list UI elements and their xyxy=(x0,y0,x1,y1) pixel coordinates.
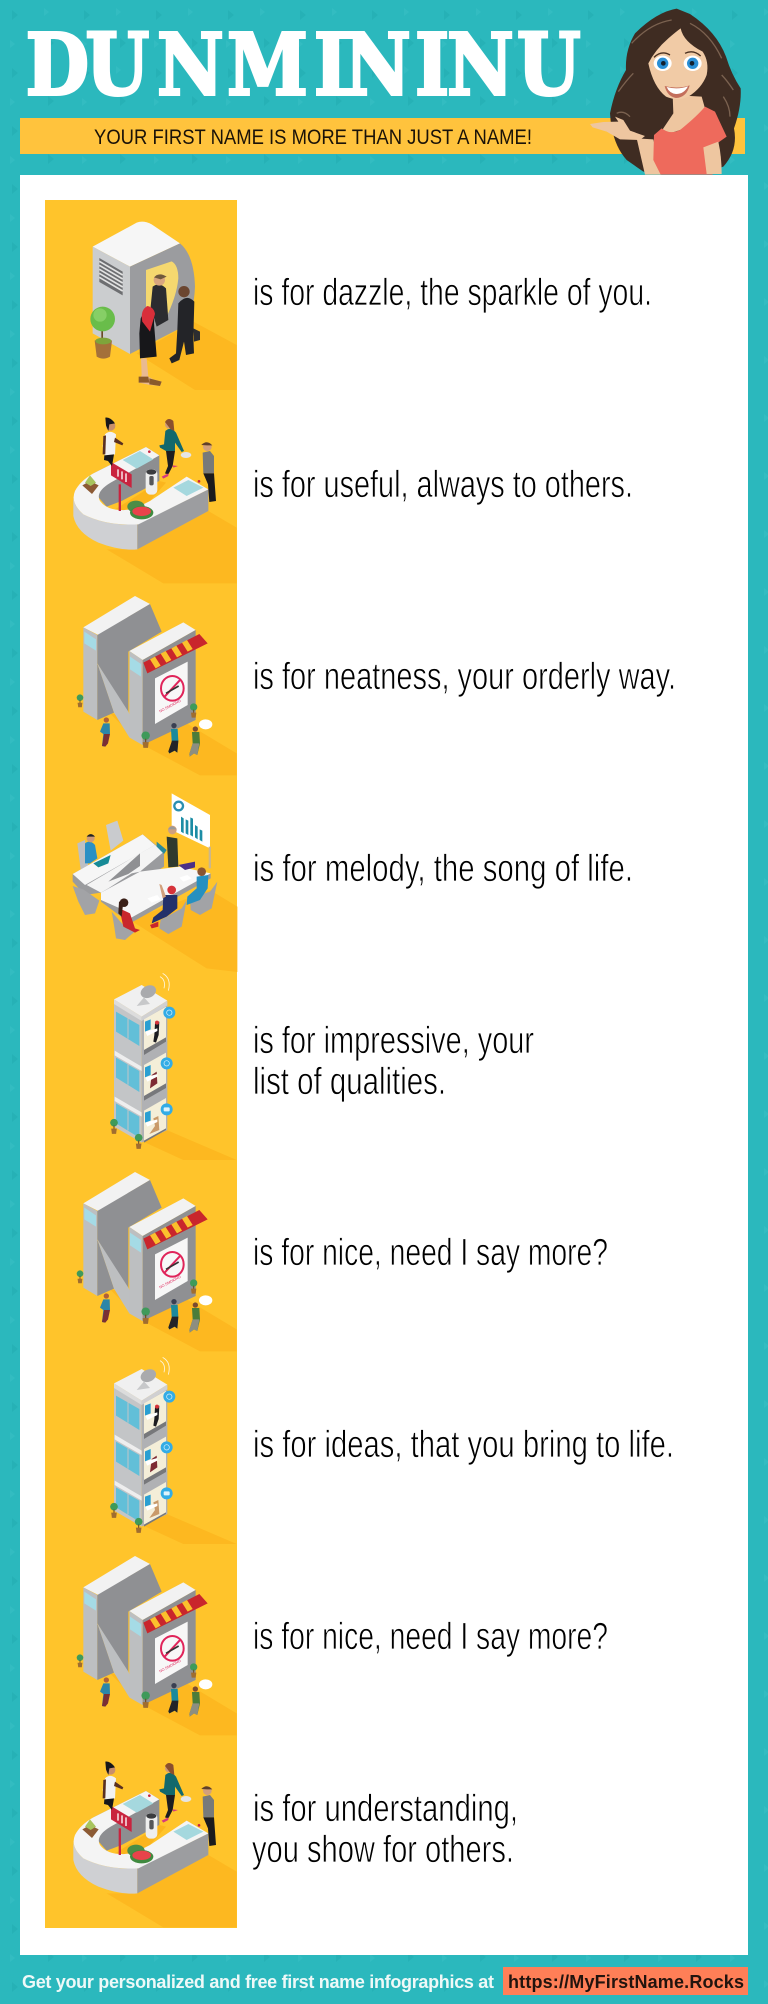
icon: M meeting table xyxy=(73,793,237,972)
icon: U counter with people xyxy=(73,1762,237,1927)
footer text: Get your personalized and free first name infographics at xyxy=(22,1972,494,1992)
icon: I office tower xyxy=(110,1357,237,1544)
row: N xyxy=(77,596,676,775)
text: U: is for understanding, xyxy=(253,1788,518,1830)
title: DUNMININU xyxy=(26,15,581,115)
text: I: is for impressive, your xyxy=(253,1020,534,1062)
icon: N storefront building xyxy=(77,1556,237,1735)
text: N: is for nice, need I say more? xyxy=(253,1616,608,1658)
icon: I office tower xyxy=(110,973,237,1160)
row: N xyxy=(77,1556,608,1735)
icon: D building with people xyxy=(90,222,237,390)
text: U: is for useful, always to others. xyxy=(253,464,633,506)
row: I xyxy=(110,1357,674,1544)
text: U: you show for others. xyxy=(252,1829,514,1871)
yellow illustration strip xyxy=(45,200,237,1928)
character illustration: woman presenting xyxy=(590,9,741,175)
text: I xyxy=(253,1020,534,1103)
footer url badge xyxy=(503,1967,748,1995)
text: U xyxy=(252,1788,518,1871)
footer xyxy=(22,1967,748,1995)
row: M xyxy=(73,793,633,972)
text: M: is for melody, the song of life. xyxy=(253,848,633,890)
icon: N storefront building xyxy=(77,1172,237,1351)
row: I xyxy=(110,973,534,1160)
icon: U counter with people xyxy=(73,418,237,583)
banner xyxy=(20,118,745,154)
text: N: is for nice, need I say more? xyxy=(253,1232,608,1274)
banner tagline: YOUR FIRST NAME IS MORE THAN JUST A NAME! xyxy=(94,125,532,149)
row: U xyxy=(73,1762,518,1927)
text: I: list of qualities. xyxy=(253,1061,446,1103)
row: N xyxy=(77,1172,608,1351)
icon: N storefront building xyxy=(77,596,237,775)
footer url badge: https://MyFirstName.Rocks xyxy=(508,1972,744,1992)
row: D xyxy=(90,222,652,390)
row: U xyxy=(73,418,633,583)
